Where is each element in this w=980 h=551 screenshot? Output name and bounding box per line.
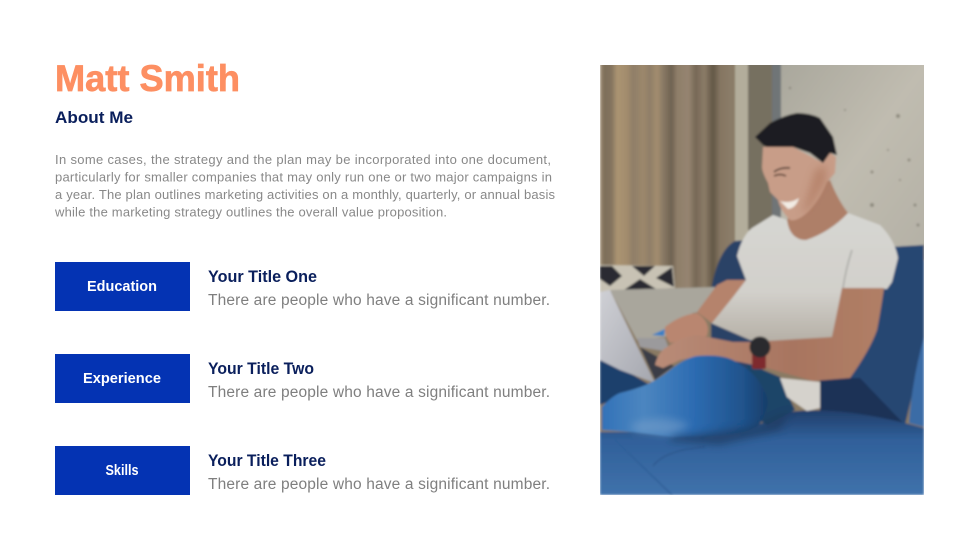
row: education [55, 262, 550, 311]
shirt hem [780, 378, 820, 411]
forearm and lower hand [655, 288, 884, 381]
seat [600, 410, 924, 495]
button: Experience [55, 354, 190, 403]
row: skills [55, 446, 550, 495]
button: Experience: Experience [83, 371, 161, 387]
keyboard [640, 347, 674, 380]
intro paragraph: while the marketing strategy outlines the overall value proposition. [54, 204, 447, 220]
jeans knee [602, 356, 768, 437]
neck [787, 180, 848, 240]
button: Skills [55, 446, 190, 495]
title: Matt Smith [55, 58, 240, 99]
row: experience [55, 354, 550, 403]
sofa back [710, 239, 753, 370]
intro paragraph: particularly for smaller companies that may only run one or two major campaigns in [55, 170, 552, 184]
smile [780, 198, 799, 209]
intro paragraph: In some cases, the strategy and the plan may be incorporated into one document, [55, 152, 551, 167]
arm behind [697, 280, 746, 323]
photo: man with laptop on sofa [600, 60, 929, 495]
button: Skills: Skills [106, 463, 138, 479]
face [762, 147, 836, 220]
dark trousers left [600, 355, 650, 405]
heading: Your Title Three: Your Title Three [208, 452, 326, 470]
intro paragraph [54, 152, 556, 220]
laptop base [637, 338, 670, 352]
watch strap [752, 352, 766, 369]
pen [652, 329, 665, 336]
intro paragraph: a year. The plan outlines marketing activities on a monthly, quarterly, or annual basis [55, 187, 556, 202]
watch face [750, 336, 770, 358]
description: There are people who have a significant number. [208, 384, 550, 401]
laptop lid [600, 290, 655, 383]
heading: Your Title Two: Your Title Two [208, 360, 314, 378]
hair [755, 113, 837, 163]
subtitle: About Me: About Me [55, 109, 133, 127]
grey pillow [610, 287, 715, 340]
description: There are people who have a significant number. [208, 476, 550, 493]
upper hand [665, 313, 708, 343]
back leg [745, 363, 795, 425]
shirt [711, 213, 898, 344]
button: Education: Education [87, 279, 157, 295]
patterned pillow [600, 265, 675, 292]
heading: Your Title One: Your Title One [208, 268, 317, 286]
button: Education [55, 262, 190, 311]
description: There are people who have a significant number. [208, 292, 550, 309]
